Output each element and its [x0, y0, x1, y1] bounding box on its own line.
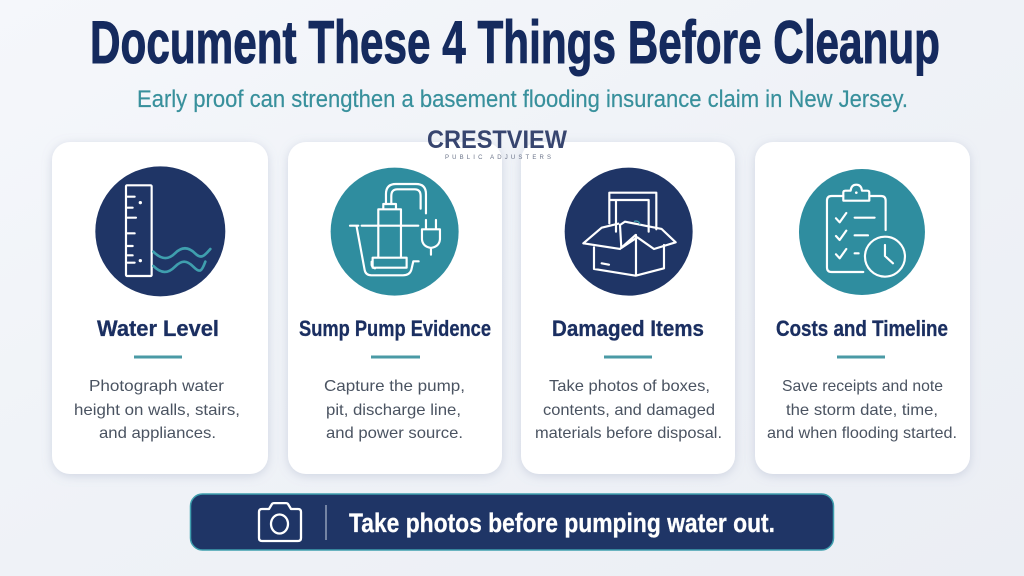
panel: water level [52, 142, 268, 474]
text: sump pump description: pit, discharge line, [326, 402, 461, 419]
text: costs description: Save receipts and note [782, 378, 943, 395]
icon: camera [259, 503, 301, 541]
text: water level description: and appliances. [99, 425, 216, 442]
text: sump pump description: Capture the pump, [324, 378, 465, 395]
callout text: Take photos before pumping water out. [349, 508, 775, 538]
heading: water level: Water Level [97, 316, 219, 341]
panel: damaged items [521, 142, 735, 474]
text: sump pump description [324, 378, 465, 442]
heading: costs and timeline: Costs and Timeline [776, 316, 948, 341]
icon: open box [565, 168, 693, 296]
text: costs description: and when flooding started. [767, 425, 957, 442]
text: water level description: height on walls, stairs, [74, 402, 240, 419]
logo: Crestview: PUBLIC ADJUSTERS [445, 155, 551, 161]
text: damaged items description: Take photos of boxes, [549, 378, 710, 395]
logo: Crestview: CRESTVIEW [427, 126, 567, 154]
panel: sump pump evidence [288, 142, 502, 474]
panel: costs and timeline [755, 142, 970, 474]
icon: sump pump and plug [331, 168, 459, 296]
subtitle: Early proof can strengthen a basement flooding insurance claim in New Jersey. [137, 86, 908, 113]
text: sump pump description: and power source. [326, 425, 463, 442]
text: water level description: Photograph water [89, 378, 225, 395]
text: costs description [767, 378, 957, 442]
text: damaged items description [535, 378, 722, 442]
icon: clipboard and clock [799, 169, 925, 295]
text: costs description: the storm date, time, [786, 402, 938, 419]
text: water level description [74, 378, 240, 442]
heading: sump pump evidence: Sump Pump Evidence [299, 316, 491, 341]
icon: ruler and water waves [95, 166, 225, 296]
heading: damaged items: Damaged Items [552, 316, 704, 341]
text: damaged items description: contents, and damaged [543, 402, 715, 419]
callout banner [190, 494, 834, 550]
text: damaged items description: materials before disposal. [535, 425, 722, 442]
